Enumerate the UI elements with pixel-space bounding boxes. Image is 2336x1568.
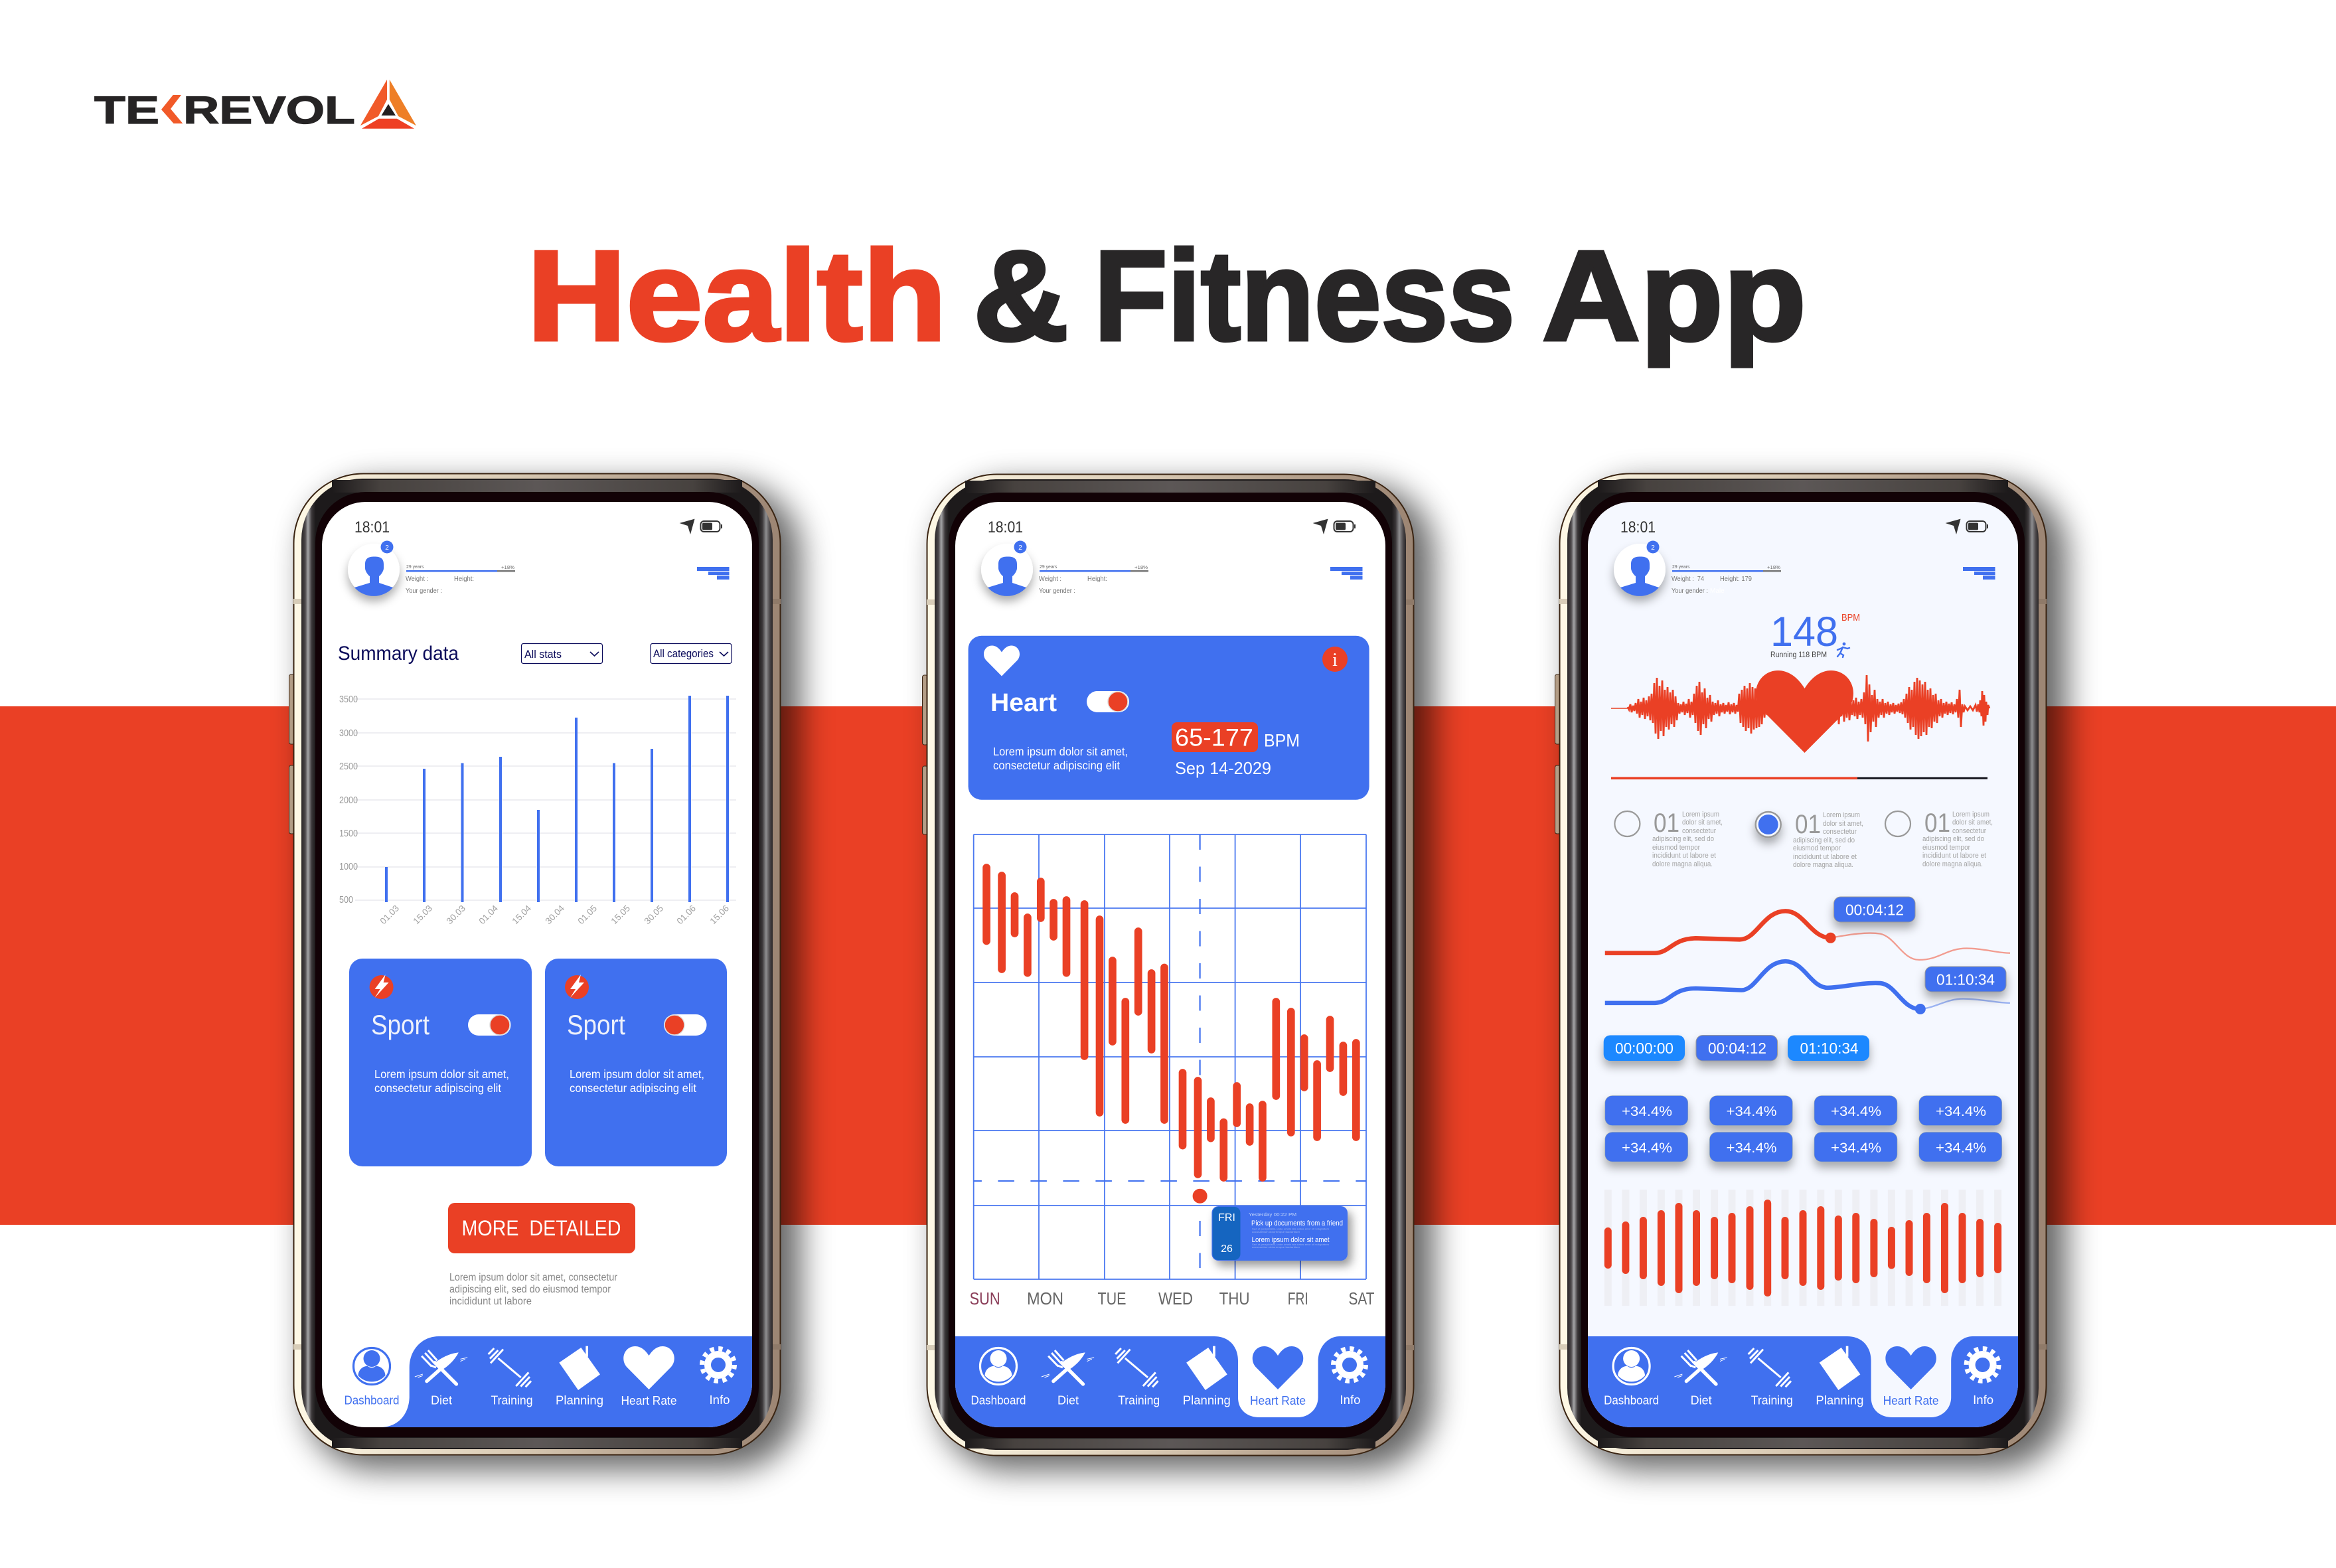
option 3: dolore magna aliqua.: [1922, 860, 1983, 868]
bottom navigation: [955, 1336, 1385, 1427]
tooltip: [1211, 1206, 1348, 1261]
summary heading: Summary data: [338, 643, 459, 665]
bar chart: 01.04: [477, 903, 500, 926]
dropdown: all categories: [651, 644, 732, 664]
bar chart: 2500: [339, 761, 358, 772]
blue line chart: [1605, 961, 2010, 1014]
time tag 01:10:34: 01:10:34: [1936, 971, 1995, 988]
date: Sep 14-2029: [1175, 758, 1271, 778]
option 1: eiusmod tempor: [1652, 844, 1700, 852]
weekday labels: WED: [1158, 1289, 1193, 1308]
percentage pills: +34.4%: [1726, 1104, 1776, 1119]
percentage pills: +34.4%: [1831, 1104, 1881, 1119]
heart: [1756, 670, 1853, 753]
sport card 1: consectetur adipiscing elit: [374, 1081, 501, 1095]
option 2 selected: adipiscing elit, sed do: [1793, 836, 1855, 844]
equalizer bars: [1608, 1190, 1998, 1306]
profile header: 29 years: [1672, 564, 1690, 570]
bottom navigation: Info: [1973, 1393, 1993, 1407]
bottom navigation: Diet: [431, 1394, 452, 1407]
bar chart: 2000: [339, 795, 358, 806]
profile header: [1614, 540, 1781, 596]
bottom navigation: Info: [709, 1393, 730, 1407]
heart icon: [984, 646, 1020, 676]
logo: [94, 80, 416, 132]
bar chart: 1000: [339, 862, 358, 872]
profile header: 2: [385, 544, 389, 552]
weekday labels: FRI: [1288, 1289, 1308, 1308]
sport card 1: Sport: [371, 1009, 429, 1040]
option 2 selected: Lorem ipsum: [1823, 811, 1860, 819]
sport card 2: Sport: [567, 1009, 625, 1040]
option 3: 01: [1924, 809, 1950, 838]
logo wordmark: [94, 89, 355, 132]
bar chart: 3500: [339, 694, 358, 705]
menu icon: [1330, 567, 1362, 580]
caption text: Lorem ipsum dolor sit amet, consectetur: [449, 1272, 617, 1283]
toggle: [1087, 691, 1129, 712]
info badge: i: [1332, 650, 1338, 670]
profile header: Your gender :: [406, 587, 442, 595]
time pill row: 01:10:34: [1800, 1040, 1859, 1057]
percentage pills: [1605, 1095, 2002, 1162]
profile header: Weight :: [406, 575, 428, 583]
percentage pills: +34.4%: [1622, 1104, 1672, 1119]
sport card 2: consectetur adipiscing elit: [570, 1081, 696, 1095]
profile header: Height:: [454, 575, 474, 583]
dropdown: all stats: [522, 644, 603, 664]
candle bars: [986, 868, 1356, 1178]
bar chart: [339, 694, 736, 926]
red line chart: [1605, 911, 2010, 960]
phone frame: [923, 474, 1434, 1470]
option 1: [1614, 809, 1723, 868]
bar chart: 15.06: [708, 903, 731, 926]
option 3: adipiscing elit, sed do: [1922, 835, 1984, 843]
title: [527, 224, 1806, 367]
screen: [1588, 502, 2018, 1427]
percentage pills: +34.4%: [1936, 1140, 1986, 1156]
percentage pills: +34.4%: [1726, 1140, 1776, 1156]
bottom navigation: Heart Rate: [1883, 1394, 1939, 1407]
menu icon: [697, 567, 729, 580]
title: Health: [527, 224, 947, 367]
bottom navigation: Training: [1751, 1394, 1793, 1407]
option 2 selected: incididunt ut labore et: [1793, 853, 1857, 861]
dropdown: all categories: All categories: [653, 647, 714, 660]
option 2 selected: dolore magna aliqua.: [1793, 861, 1853, 869]
time tag 00:04:12: [1834, 897, 1915, 922]
sport card 1: [349, 959, 532, 1166]
caption text: [449, 1272, 617, 1307]
weekday labels: SAT: [1349, 1289, 1375, 1308]
bottom navigation: Dashboard: [1604, 1394, 1659, 1407]
logo wordmark: REVOL: [183, 89, 355, 132]
percentage pills: +34.4%: [1622, 1140, 1672, 1156]
bottom navigation: Diet: [1057, 1394, 1079, 1407]
heart card: [969, 636, 1369, 800]
waveform: [1611, 670, 1989, 753]
option 1: consectetur: [1682, 827, 1716, 835]
option 2 selected: dolor sit amet,: [1823, 820, 1863, 828]
option 1: Lorem ipsum: [1682, 811, 1719, 819]
bar chart: 15.05: [609, 903, 632, 926]
percentage pills: +34.4%: [1831, 1140, 1881, 1156]
profile header: Weight :: [1039, 575, 1061, 583]
bpm readout: Running 118 BPM: [1770, 651, 1827, 659]
info badge: [1322, 647, 1348, 672]
profile header: +18%: [1134, 564, 1148, 570]
progress slider: [1611, 777, 1987, 779]
bottom navigation: Diet: [1691, 1394, 1712, 1407]
tooltip: accusantium doloremque laudantium: [1252, 1245, 1300, 1249]
bpm value: 65-177: [1175, 724, 1253, 751]
bottom navigation: Planning: [1183, 1394, 1231, 1407]
status icons: [680, 519, 722, 534]
logo triangle: [360, 80, 416, 129]
tooltip: Yesterday 00:22 PM: [1249, 1212, 1296, 1217]
dashed guides: [1199, 834, 1201, 1268]
percentage pills: +34.4%: [1936, 1104, 1986, 1119]
status bar time: 18:01: [1620, 518, 1656, 536]
profile header: +18%: [1767, 564, 1780, 570]
weekday labels: SUN: [970, 1289, 1000, 1308]
tooltip: Sed ut perspiciatis, unde omnis iste natus error sit voluptatem: [1252, 1227, 1330, 1231]
caption text: incididunt ut labore: [449, 1296, 532, 1307]
phone 2: heart: [923, 474, 1434, 1470]
phone frame: [289, 474, 801, 1470]
weekday labels: TUE: [1098, 1289, 1126, 1308]
dropdown: all stats: All stats: [524, 648, 562, 661]
bar chart: 3000: [339, 728, 358, 739]
menu icon: [1963, 567, 1995, 580]
tooltip: 26: [1221, 1243, 1233, 1255]
button: more detailed: MORE DETAILED: [462, 1216, 621, 1240]
marker dot: [1192, 1188, 1207, 1204]
card title: Heart: [990, 689, 1057, 717]
icon: runner: [1837, 643, 1849, 657]
tooltip: accusantium doloremque laudantium: [1252, 1230, 1300, 1233]
time pill row: 00:00:00: [1615, 1040, 1674, 1057]
logo wordmark: TE: [94, 89, 159, 132]
bar chart: 01.06: [675, 903, 698, 926]
profile header: [981, 540, 1148, 596]
red band: [0, 706, 2336, 1225]
bar chart: 1500: [339, 828, 358, 839]
bottom navigation: [344, 1336, 752, 1427]
bottom navigation: Training: [491, 1394, 532, 1407]
profile header: Height: 179: [1720, 575, 1752, 583]
profile header: 2: [1651, 544, 1655, 552]
option 2 selected: consectetur: [1823, 828, 1857, 836]
option 3: [1885, 809, 1993, 868]
profile header: 2: [1018, 544, 1022, 552]
bottom navigation: [1588, 1336, 2018, 1427]
caption text: adipiscing elit, sed do eiusmod tempor: [449, 1284, 611, 1295]
bottom navigation: Heart Rate: [621, 1394, 677, 1407]
profile header: Male: [1710, 588, 1725, 595]
button: more detailed: [448, 1203, 635, 1253]
screen: [322, 502, 752, 1427]
status icons: [1946, 519, 1988, 534]
phone frame: [1555, 474, 2066, 1470]
bpm value: BPM: [1264, 730, 1300, 750]
option 3: eiusmod tempor: [1922, 844, 1970, 852]
status icons: [1313, 519, 1356, 534]
option 2 selected: [1756, 810, 1863, 869]
title: &: [973, 224, 1069, 367]
option 3: dolor sit amet,: [1952, 819, 1993, 826]
option 1: incididunt ut labore et: [1652, 852, 1716, 860]
option 1: dolor sit amet,: [1682, 819, 1723, 826]
profile header: 29 years: [1040, 564, 1057, 570]
time tag 01:10:34: [1925, 967, 2006, 992]
weekday labels: [970, 1289, 1375, 1308]
sport card 2: Lorem ipsum dolor sit amet,: [570, 1067, 704, 1081]
bar chart: 30.03: [445, 903, 467, 926]
sport card 1: Lorem ipsum dolor sit amet,: [374, 1067, 509, 1081]
tooltip: FRI: [1218, 1212, 1235, 1223]
bottom navigation: Planning: [556, 1394, 603, 1407]
bar chart: 01.03: [378, 903, 401, 926]
option 2 selected: 01: [1795, 810, 1821, 839]
screen: [955, 502, 1385, 1427]
bottom navigation: Training: [1118, 1394, 1160, 1407]
description: Lorem ipsum dolor sit amet,: [993, 745, 1128, 758]
bar chart: 500: [339, 895, 353, 905]
bottom navigation: Planning: [1816, 1394, 1863, 1407]
bar chart: 01.05: [576, 903, 599, 926]
description: consectetur adipiscing elit: [993, 759, 1120, 772]
option 3: incididunt ut labore et: [1922, 852, 1986, 860]
weekday labels: THU: [1219, 1289, 1250, 1308]
bottom navigation: Dashboard: [344, 1394, 400, 1407]
profile header: Height:: [1087, 575, 1107, 583]
grid: [974, 834, 1366, 1279]
tooltip: Lorem ipsum dolor sit amet: [1252, 1236, 1330, 1244]
time pill row: [1604, 1036, 1869, 1061]
tooltip: Pick up documents from a friend: [1251, 1219, 1343, 1227]
option 1: dolore magna aliqua.: [1652, 860, 1713, 868]
weekday labels: MON: [1027, 1289, 1063, 1308]
bpm readout: BPM: [1841, 612, 1860, 623]
bar chart: 15.03: [412, 903, 434, 926]
bar chart: 30.04: [544, 903, 566, 926]
bpm value: [1172, 722, 1300, 752]
phone 3: live bpm: [1555, 474, 2066, 1470]
profile header: +18%: [501, 564, 514, 570]
description: [993, 745, 1128, 772]
bpm readout: 148: [1770, 609, 1838, 655]
status bar time: 18:01: [354, 518, 390, 536]
heart-rate chart: [970, 834, 1375, 1308]
option 3: consectetur: [1952, 827, 1986, 835]
bar chart: 15.04: [510, 903, 533, 926]
profile header: Your gender :: [1672, 587, 1708, 595]
bottom navigation: Dashboard: [971, 1394, 1026, 1407]
title: Fitness: [1094, 224, 1515, 367]
time pill row: 00:04:12: [1708, 1040, 1766, 1057]
title: App: [1542, 224, 1806, 367]
bar chart: 30.05: [643, 903, 665, 926]
profile header: [348, 540, 515, 596]
bottom navigation: Info: [1340, 1393, 1361, 1407]
profile header: Weight : 74: [1672, 575, 1704, 583]
sport card 2: [545, 959, 727, 1166]
status bar time: 18:01: [988, 518, 1023, 536]
option 1: 01: [1654, 809, 1679, 838]
option 1: adipiscing elit, sed do: [1652, 835, 1714, 843]
option 3: Lorem ipsum: [1952, 811, 1989, 819]
tooltip: Sed ut perspiciatis, unde omnis iste natus error sit voluptatem: [1252, 1243, 1330, 1246]
option 2 selected: eiusmod tempor: [1793, 844, 1841, 852]
profile header: Your gender :: [1039, 587, 1075, 595]
time tag 00:04:12: 00:04:12: [1845, 902, 1904, 919]
phone 1: summary data: [289, 474, 801, 1470]
profile header: 29 years: [406, 564, 424, 570]
bottom navigation: Heart Rate: [1250, 1394, 1306, 1407]
